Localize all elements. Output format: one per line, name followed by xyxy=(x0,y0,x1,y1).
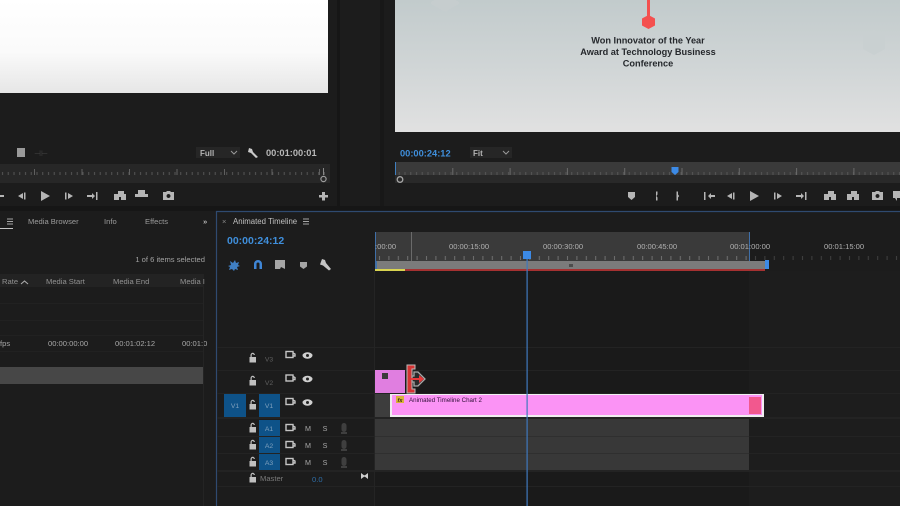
project browser table header: Rate xyxy=(2,277,18,286)
program monitor transport buttons xyxy=(628,191,900,201)
track names: A2 xyxy=(265,443,273,450)
timeline tool icons xyxy=(228,259,331,271)
track names: V1 xyxy=(265,403,273,410)
source patch V1 and target tracks xyxy=(224,394,280,470)
project browser tabs xyxy=(0,217,207,229)
track rows xyxy=(217,271,900,506)
mute and solo labels: S xyxy=(323,441,328,450)
program monitor timecode: 00:00:24:12 xyxy=(400,148,451,158)
eye icons xyxy=(302,352,312,406)
mute and solo labels: S xyxy=(323,458,328,467)
timeline tab: Animated Timeline xyxy=(233,217,297,226)
sync clip icons xyxy=(286,352,295,464)
project browser table header: Media End xyxy=(113,277,149,286)
timeline ruler: 00:01:00:00 xyxy=(730,242,770,251)
faint hexagon decoration top xyxy=(431,0,459,12)
track names: A3 xyxy=(265,460,273,467)
timeline ruler: 00:00:15:00 xyxy=(449,242,489,251)
source monitor transport buttons xyxy=(0,190,328,201)
project browser tabs: » xyxy=(203,217,207,226)
source monitor zoom and timecode controls: 00:01:00:01 xyxy=(266,148,317,158)
timeline timecode: 00:00:24:12 xyxy=(227,235,284,247)
track names: V2 xyxy=(265,380,273,387)
source monitor ruler xyxy=(0,164,330,183)
project browser table header: Media I xyxy=(180,277,205,286)
master level: 0.0 xyxy=(312,475,323,484)
project browser selected row values: fps xyxy=(0,339,10,348)
master track label: Master xyxy=(260,474,284,483)
microphone icons xyxy=(341,423,347,468)
track names xyxy=(231,356,273,467)
program monitor ruler xyxy=(395,162,900,183)
timeline tab: × xyxy=(222,217,226,226)
project browser selected row values: 00:01:0 xyxy=(182,339,207,348)
milestone caption: Conference xyxy=(623,58,673,68)
timeline ruler: 00:00:45:00 xyxy=(637,242,677,251)
clip: Animated Timeline Chart 2 xyxy=(390,394,764,417)
milestone marker xyxy=(642,0,655,29)
project browser tabs: Info xyxy=(104,217,117,226)
panel: project browser xyxy=(0,217,207,506)
project browser selected row values: 00:00:00:00 xyxy=(48,339,88,348)
clip: Animated Timeline Chart 2: Animated Timeline Chart 2 xyxy=(409,397,482,404)
clip: Animated Timeline Chart 2: fx xyxy=(398,398,403,404)
project browser selected row values: 00:01:02:12 xyxy=(115,339,155,348)
fit dropdown xyxy=(470,147,512,158)
program monitor video frame xyxy=(395,0,900,132)
project browser table header xyxy=(0,274,205,287)
panel: timeline xyxy=(216,212,900,506)
timeline ruler xyxy=(375,232,900,261)
track names: A1 xyxy=(265,426,273,433)
track names: V1 xyxy=(231,403,239,410)
milestone caption: Award at Technology Business xyxy=(580,47,716,57)
milestone caption xyxy=(580,36,716,68)
mute and solo labels: S xyxy=(323,424,328,433)
timeline ruler: :00:00 xyxy=(375,242,396,251)
source monitor zoom and timecode controls: ⊣⊢ xyxy=(34,149,48,158)
project browser highlighted row xyxy=(0,367,203,384)
clip on V2 xyxy=(375,370,405,393)
mute and solo labels: M xyxy=(305,424,311,433)
track headers xyxy=(224,352,368,484)
mute and solo labels xyxy=(305,424,328,467)
timeline zoom scrollbar and render bar xyxy=(375,260,769,271)
panel: source monitor xyxy=(0,0,330,201)
mute and solo labels: M xyxy=(305,458,311,467)
source monitor zoom and timecode controls xyxy=(17,147,317,158)
playhead xyxy=(672,167,678,175)
fit dropdown: Fit xyxy=(473,149,483,158)
master fit icon xyxy=(361,473,368,479)
panel: program monitor xyxy=(395,0,900,201)
selection count: 1 of 6 items selected xyxy=(135,255,205,264)
mute and solo labels: M xyxy=(305,441,311,450)
milestone caption: Won Innovator of the Year xyxy=(591,36,705,46)
track names: V3 xyxy=(265,356,273,364)
lock icons xyxy=(250,353,256,482)
project browser tabs: Effects xyxy=(145,217,168,226)
project browser table header: Media Start xyxy=(46,277,86,286)
project browser row lines xyxy=(0,303,203,352)
timeline playhead line xyxy=(523,251,531,506)
timeline ruler: 00:00:30:00 xyxy=(543,242,583,251)
timeline panel border xyxy=(216,212,900,506)
ripple edit cursor xyxy=(407,365,425,393)
source monitor video frame xyxy=(0,0,328,93)
source monitor zoom and timecode controls: Full xyxy=(200,149,214,158)
project browser tabs: Media Browser xyxy=(28,217,79,226)
faint hexagon decoration xyxy=(863,30,885,55)
project browser selected row values xyxy=(0,339,207,348)
timeline ruler: 00:01:15:00 xyxy=(824,242,864,251)
